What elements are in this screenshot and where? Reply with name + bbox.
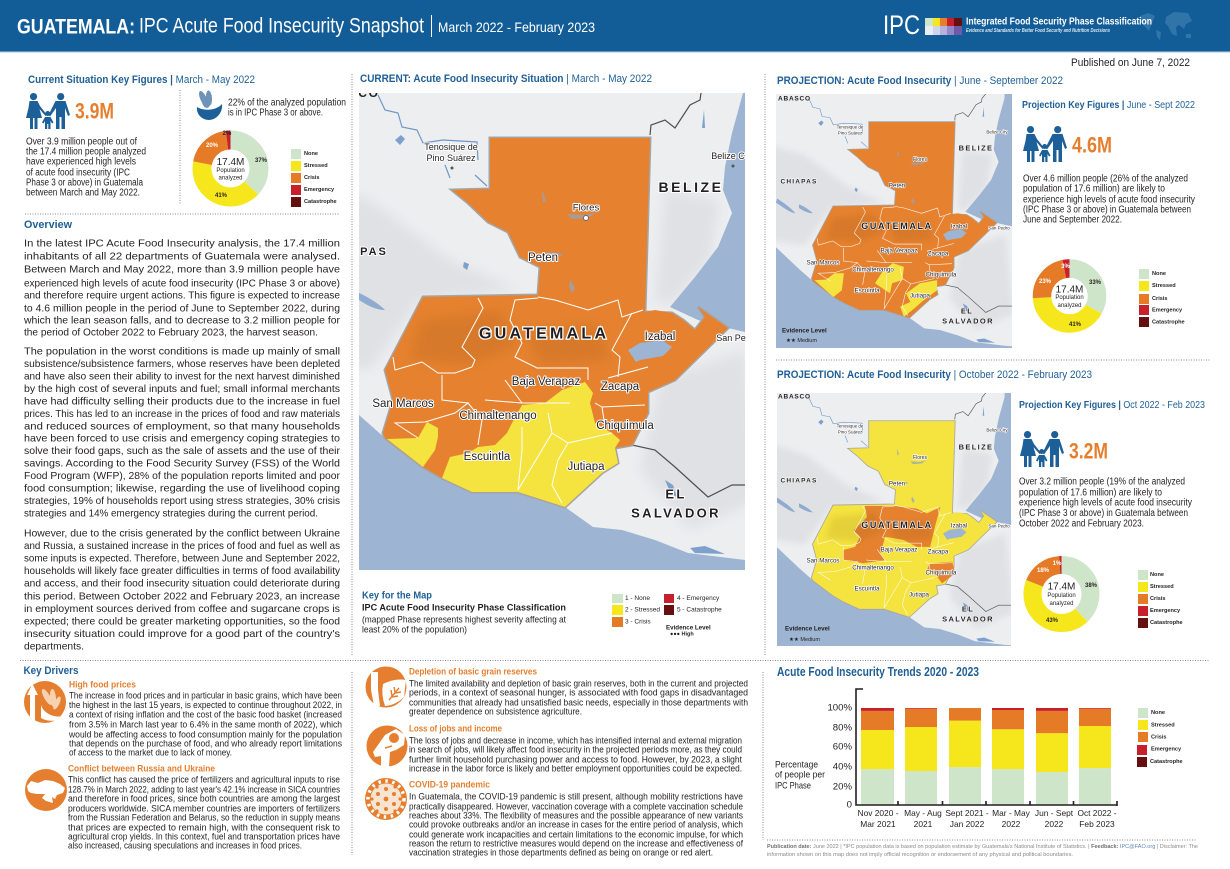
map: projection June-September: Peten (889, 182, 906, 190)
text: overview paragraph 1: Between March and May 2022, more than 3.9 million people have (24, 264, 340, 276)
driver: COVID-19 pandemic: could provoke outbreaks and/or an increase in cases for the entire period of analysis, which (409, 820, 743, 830)
heading: projection June-September: PROJECTION: Acute Food Insecurity | June - September 2022 (777, 75, 1063, 87)
key for the map: IPC Acute Food Insecurity Phase Classification (362, 602, 566, 614)
map: current situation: SALVADOR (631, 506, 721, 520)
legend: phases: None (1152, 271, 1166, 277)
map: current situation: Peten (528, 252, 558, 264)
panel: current map (280, 60, 820, 638)
map: projection June-September: Pino Suárez (838, 130, 863, 136)
legend: phases: None (1150, 572, 1164, 578)
map: projection June-September: SALVADOR (942, 316, 994, 326)
map: projection October-February: Escuintla (854, 586, 880, 592)
text: projection description: (IPC Phase 3 or above) in Guatemala between (1023, 204, 1191, 216)
map: current situation: PAS (360, 246, 388, 258)
map: projection June-September: GUATEMALA (861, 221, 933, 231)
map: current situation: GUATEMALA (479, 326, 606, 342)
map: projection June-September: BELIZE (959, 144, 993, 152)
donut chart: October-February population by phase: analyzed (1049, 601, 1074, 607)
x axis labels: Mar - May (992, 808, 1031, 818)
y axis title (775, 760, 826, 792)
heading: projection key figures: Projection Key Figures | June - Sept 2022 (1022, 99, 1195, 111)
text: overview paragraph 3: expected; there could be greater marketing opportunities, so the food (24, 616, 340, 628)
text: share in phase 3 or above: 22% of the analyzed population (228, 98, 346, 108)
y axis labels: 80% (833, 722, 852, 734)
driver: depletion of basic grain reserves: Depletion of basic grain reserves (409, 666, 537, 678)
driver: high food prices: from 3.5% in March last year to 6.4% in the same month of 2022), which (69, 720, 342, 730)
map: projection June-September: Escuintla (854, 288, 880, 294)
map evidence level: Evidence Level (785, 626, 830, 632)
map: projection June-September: Chiquimula (926, 272, 957, 278)
map: projection June-September: Zacapa (928, 250, 949, 258)
driver: loss of jobs and income: increase in the labor force is likely and better employment opportunities could be expected. (409, 764, 742, 774)
donut chart: June-September population by phase: 23% (1039, 279, 1052, 285)
legend: phases: Catastrophe (1150, 620, 1183, 626)
y axis title: Percentage (775, 760, 818, 770)
map evidence level (782, 328, 827, 344)
driver: loss of jobs and income: further limit household purchasing power and access to food. However, by 2023, a slight (409, 754, 742, 766)
figure: 4.6M people: 4.6M (1072, 132, 1112, 158)
y axis labels: 60% (833, 742, 852, 752)
map evidence level (785, 626, 830, 643)
driver: depletion of basic grain reserves: communities that already had unsatisfied basic needs, especially in those departments with (409, 698, 748, 708)
text: overview paragraph 3: this period. Between October 2022 and February 2023, an increase (24, 591, 340, 602)
text: projection description: population of 17.6 million) are likely to (1023, 184, 1165, 194)
map: current situation: Escuintla (464, 451, 511, 463)
text: overview paragraph 1: which the lean season falls, and to decrease to 3.2 million people for (23, 316, 341, 326)
text: overview paragraph 1: experienced high levels of acute food insecurity (IPC Phase 3 or above) (24, 278, 340, 290)
text: projection description (1019, 476, 1192, 530)
text: overview paragraph 2: and have also seen their ability to invest for the next harvest diminished (24, 372, 340, 382)
map: projection June-September: San Marcos (806, 260, 840, 266)
driver: high food prices: would be affecting access to food consumption mainly for the population (68, 730, 342, 740)
donut chart: June-September population by phase: analyzed (1057, 303, 1082, 309)
legend: phases: Emergency (304, 187, 335, 193)
legend: phases: Crisis (304, 175, 320, 181)
text: current figure description: Over 3.9 million people out of (26, 136, 137, 148)
text: current figure description: the 17.4 million people analyzed (26, 146, 146, 158)
map: projection October-February: Flores (913, 455, 927, 461)
map: current situation: Pino Suárez (426, 153, 476, 163)
text: share in phase 3 or above: is in IPC Phase 3 or above. (228, 108, 323, 118)
map: current situation: BELIZE (659, 179, 723, 195)
legend: phases: Catastrophe (1152, 320, 1185, 326)
text: overview paragraph 2: strategies, 19% of households report using stress strategies, 30% crisis (24, 496, 340, 507)
legend: phases: Crisis (1151, 734, 1167, 740)
figure: 3.9M people: 3.9M (75, 98, 114, 124)
text: overview paragraph 2: and reduced sources of employment, so that many households (24, 421, 340, 432)
text: projection description (1023, 174, 1195, 226)
map: current situation: San Marcos (372, 398, 434, 410)
driver: high food prices: the highest in the last 15 years, is expected to continue throughout 2022, in (69, 700, 342, 711)
panel: projection October-February (757, 369, 1205, 677)
panel: overview (23, 219, 341, 652)
map: projection June-September: Baja Verapaz (881, 248, 917, 254)
x axis labels: Oct 2022 - (1077, 808, 1117, 818)
key for the map (362, 590, 722, 638)
driver: conflict between Russia and Ukraine: and therefore in food prices, since both countries are among the largest (68, 794, 340, 804)
map evidence level: ★★ Medium (789, 636, 820, 643)
map: projection October-February: Chiquimula (926, 570, 957, 576)
y axis title: of people per (775, 770, 826, 780)
driver: depletion of basic grain reserves (366, 666, 748, 718)
donut chart: October-February population by phase: 18% (1037, 568, 1050, 574)
text: overview paragraph 3: households will likely face greater difficulties in terms of food availability (24, 566, 341, 577)
map: projection October-February: Belize City (986, 428, 1008, 432)
x axis labels: Nov 2020 - (858, 808, 899, 818)
text: projection description: population of 17.6 million) are likely to (1019, 488, 1162, 498)
legend: map phases: ●●● High (670, 632, 694, 638)
map: projection June-September: CHIAPAS (781, 178, 817, 186)
donut chart: June-September population by phase: Population (1055, 295, 1084, 301)
map: projection June-September: Belize City (986, 130, 1008, 134)
donut chart: June-September population by phase: 33% (1089, 280, 1102, 286)
heading: projection October-February: PROJECTION: Acute Food Insecurity | October 2022 - February 2023 (777, 369, 1092, 381)
map: current situation: EL (665, 486, 687, 502)
text: current figure description: have experienced high levels (26, 156, 136, 168)
legend: phases: Emergency (1151, 746, 1182, 752)
text: overview paragraph 2: The population in the worst conditions is made up mainly of small (24, 346, 340, 358)
map: current situation: Izabal (645, 331, 675, 343)
map: current situation: Belize C (711, 151, 745, 161)
driver: high food prices: of access to the market due to lack of money. (69, 748, 232, 758)
legend: phases: Stressed (1150, 584, 1174, 590)
IPC logo (883, 10, 1192, 40)
donut chart: October-February population by phase: 38% (1085, 583, 1098, 589)
driver: COVID-19 pandemic: vaccination strategies in those departments defined as being on orange or red alert. (409, 848, 713, 858)
text: overview paragraph 1: and therefore require urgent actions. This figure is expected to increase (24, 290, 340, 302)
text: overview paragraph 2: savings. According to the Food Security Survey (FSS) of the World (24, 459, 340, 470)
legend: phases: Crisis (1150, 596, 1166, 602)
donut chart: October-February population by phase: Population (1047, 593, 1076, 599)
map: current situation: Tenosique de (424, 142, 478, 152)
text: overview paragraph 3 (24, 528, 341, 652)
text: overview paragraph 3: and access, and their food insecurity situation could deteriorate during (24, 579, 340, 590)
heading: key drivers: Key Drivers (24, 665, 78, 677)
text: overview paragraph 1: In the latest IPC Acute Food Insecurity analysis, the 17.4 million (24, 238, 340, 250)
panel: trends chart (775, 665, 1183, 829)
map: projection October-February: Izabal (951, 522, 967, 530)
driver: conflict between Russia and Ukraine: from the Russian Federation and Belarus, so the reduction in supply means (68, 812, 340, 824)
x axis labels: Jun - Sept (1035, 808, 1074, 818)
map: projection October-February (757, 380, 1046, 677)
map: projection October-February: Zacapa (928, 548, 949, 556)
driver: high food prices: High food prices (69, 680, 136, 690)
heading: trends: Acute Food Insecurity Trends 2020 - 2023 (777, 665, 979, 679)
donut chart: June-September population by phase: 17.4M (1056, 284, 1083, 296)
driver: COVID-19 pandemic: reason the return to restrictive measures would depend on the increase and effectiveness of (409, 838, 743, 850)
publication date: Published on June 7, 2022 (1071, 57, 1190, 69)
driver: loss of jobs and income (366, 724, 742, 774)
map: projection June-September (757, 81, 1046, 378)
text: overview paragraph 2: have been forced to use crisis and emergency coping strategies to (24, 434, 340, 445)
driver: COVID-19 pandemic: could generate work incapacities and certain limitations to the economic impulse, for which (409, 830, 743, 840)
donut chart: October-February population by phase: 1% (1053, 561, 1062, 567)
legend: phases (291, 149, 337, 207)
footer notes: information shown on this map does not imply official recognition or endorsement of any physical and political boundaries. (767, 852, 1073, 858)
map: projection October-February: CHIAPAS (781, 478, 817, 484)
text: projection description: Over 3.2 million people (19% of the analyzed (1019, 476, 1185, 488)
y axis labels: 40% (833, 762, 852, 772)
donut chart: current population by phase: analyzed (218, 176, 243, 182)
text: overview paragraph 2: strategies and 14% emergency strategies during the current period. (24, 508, 318, 520)
report title (17, 14, 595, 38)
driver: conflict between Russia and Ukraine: that prices are expected to remain high, with the consequent risk to (68, 822, 340, 834)
donut chart: October-February population by phase: 17.4M (1048, 582, 1075, 592)
legend: phases: Crisis (1152, 296, 1168, 302)
driver: COVID-19 pandemic: COVID-19 pandemic (409, 780, 491, 790)
donut chart: October-February population by phase (1032, 561, 1098, 624)
driver: depletion of basic grain reserves: greater dependence on subsistence agriculture. (409, 706, 582, 718)
driver: depletion of basic grain reserves: The limited availability and depletion of basic grain reserves, both in the current and projected (409, 678, 748, 690)
map: projection October-February: Chimaltenango (852, 564, 894, 572)
driver: high food prices: The increase in food prices and in particular in basic grains, which have been (69, 690, 342, 702)
donut chart: current population by phase: Population (216, 168, 245, 174)
driver: conflict between Russia and Ukraine: producers worldwide. SICA member countries are importers of fertilizers (68, 804, 340, 814)
map: projection June-September: ABASCO (778, 96, 811, 102)
x axis labels: Jan 2022 (950, 819, 985, 829)
y axis labels (827, 702, 852, 810)
legend: phases: Stressed (1152, 283, 1176, 289)
x axis labels: 2022 (1002, 819, 1021, 829)
text: projection description: Over 4.6 million people (26% of the analyzed (1023, 174, 1188, 184)
driver: loss of jobs and income: Loss of jobs and income (409, 724, 502, 734)
map evidence level: Evidence Level (782, 328, 827, 334)
icon: worried person (366, 726, 408, 767)
footer notes (767, 844, 1199, 858)
text: overview paragraph 2: Food Program (WFP), 28% of the population reports limited and poor (24, 471, 341, 482)
text: current figure description: Phase 3 or above) in Guatemala (26, 178, 143, 188)
map: projection October-February: GUATEMALA (861, 520, 933, 530)
icon: family (1023, 126, 1067, 162)
legend: phases: Catastrophe (304, 199, 337, 205)
map: projection October-February: San Pedro (988, 524, 1010, 528)
icon: coronavirus (365, 778, 407, 820)
map: current situation: San Pe (716, 333, 746, 343)
map: current situation: Zacapa (601, 381, 640, 393)
x axis labels (858, 808, 1117, 829)
donut chart: June-September population by phase: 3% (1061, 264, 1071, 270)
x axis labels: Sept 2021 - (945, 808, 989, 818)
text: overview paragraph 1: the period of October 2022 to February 2023, the harvest season. (24, 328, 318, 338)
heading: current map: CURRENT: Acute Food Insecurity Situation | March - May 2022 (360, 73, 652, 85)
x axis labels: 2022 (1045, 819, 1064, 829)
map: projection October-February: San Marcos (806, 558, 840, 564)
report title: GUATEMALA: (17, 16, 135, 38)
driver: loss of jobs and income: in search of jobs, will likely affect food insecurity in the projected periods more, as they could (409, 744, 742, 756)
stacked bar chart (775, 689, 1117, 829)
text: projection description: (IPC Phase 3 or above) in Guatemala between (1019, 508, 1188, 519)
report title: IPC Acute Food Insecurity Snapshot (139, 14, 424, 38)
header banner (0, 0, 1230, 53)
legend: phases (1137, 708, 1183, 767)
donut chart: June-September population by phase (1039, 264, 1102, 328)
map: current situation (280, 60, 820, 620)
icon: map of Ukraine (25, 769, 67, 811)
driver: conflict between Russia and Ukraine: This conflict has caused the price of fertilizers and agricultural inputs to rise (68, 774, 340, 786)
legend: map phases: 5 - Catastrophe (677, 606, 722, 614)
legend: phases: None (1151, 710, 1165, 716)
map: current situation: Jutiapa (567, 461, 605, 473)
legend: phases: Catastrophe (1150, 759, 1183, 765)
heading: current situation key figures: Current Situation Key Figures | March - May 2022 (28, 74, 255, 86)
text: overview paragraph 2 (24, 346, 341, 520)
map: projection June-September: Tenosique de (837, 124, 864, 130)
map: current situation: Flores (573, 202, 599, 214)
text: overview paragraph 1: inhabitants of all 22 departments of Guatemala were analysed. (24, 252, 340, 262)
legend: phases: Emergency (1150, 608, 1181, 614)
legend: map phases: 2 - Stressed (625, 606, 660, 614)
donut chart: June-September population by phase: 41% (1069, 322, 1082, 328)
donut chart: current population by phase (202, 131, 268, 199)
map: current situation: Chimaltenango (459, 410, 537, 422)
driver: COVID-19 pandemic (365, 778, 743, 858)
driver: conflict between Russia and Ukraine: Conflict between Russia and Ukraine (68, 764, 215, 774)
x axis labels: Mar 2021 (860, 819, 896, 829)
donut chart: current population by phase: 2% (223, 131, 232, 137)
map: projection June-September: EL (961, 306, 973, 316)
footer notes: Publication date: June 2022 | *IPC population data is based on population estimate by Guatemala's National Institute of Statistics. | Feedback: IPC@FAO.org | Disclaimer: The (767, 844, 1199, 850)
text: overview paragraph 2: solve their food gaps, such as the sale of assets and the use of their (24, 446, 341, 457)
map: current situation: CO (358, 86, 380, 100)
map: projection June-September: Izabal (951, 224, 967, 230)
x axis labels: Feb 2023 (1079, 819, 1115, 829)
map: projection October-February: Baja Verapaz (881, 546, 917, 554)
IPC logo: Evidence and Standards for Better Food Security and Nutrition Decisions (966, 28, 1110, 34)
key for the map: Key for the Map (362, 590, 432, 602)
text: overview paragraph 3: some inputs is expected. Therefore, between June and September 2022, (24, 554, 340, 564)
icon: empty grain store (366, 666, 406, 708)
heading: projection key figures: Projection Key Figures | Oct 2022 - Feb 2023 (1019, 399, 1205, 411)
donut chart: current population by phase: 17.4M (217, 157, 244, 168)
text: current figure description (26, 136, 146, 198)
driver: depletion of basic grain reserves: periods, in a context of seasonal hunger, is associated with food gaps in disadvantaged (409, 688, 748, 698)
legend: phases (1138, 570, 1183, 628)
map: projection June-September: San Pedro (988, 226, 1010, 230)
icon: bowl of grain (197, 90, 222, 120)
driver: high food prices: a context of rising inflation and the cost of the basic food basket (increased (69, 710, 342, 720)
icon: family (1020, 431, 1064, 467)
map: projection October-February: Jutiapa (909, 592, 930, 598)
map: projection October-February: BELIZE (959, 442, 993, 452)
map: projection June-September: Jutiapa (910, 292, 931, 300)
IPC logo: IPC (883, 10, 920, 40)
legend: phases: Stressed (304, 163, 328, 169)
text: overview paragraph 1: to 4.6 million people in the period of June to September 2022, during (24, 304, 340, 314)
y axis labels: 20% (833, 782, 852, 792)
text: projection description: June and September 2022. (1023, 214, 1122, 226)
map evidence level: ★★ Medium (786, 337, 817, 344)
panel: current key figures (26, 74, 346, 207)
legend: map phases: 3 - Crisis (625, 618, 651, 626)
y axis labels: 100% (827, 702, 852, 714)
map: projection June-September: Flores (913, 157, 927, 163)
map: projection October-February: Peten (889, 480, 906, 488)
IPC logo: Integrated Food Security Phase Classification (966, 16, 1152, 28)
driver: high food prices (24, 680, 342, 758)
legend: phases: Emergency (1152, 308, 1183, 314)
legend: map phases: Evidence Level (666, 624, 711, 632)
figure: 3.2M people: 3.2M (1069, 438, 1108, 464)
y axis labels: 0 (847, 800, 852, 810)
map: current situation: Chiquimula (596, 420, 654, 432)
key for the map: least 20% of the population) (362, 624, 467, 636)
text: overview paragraph 2: subsistence/subsistence farmers, whose reserves have been depleted (24, 359, 340, 370)
legend: phases: Stressed (1151, 722, 1175, 728)
text: projection description: experience high levels of acute food insecurity (1023, 194, 1195, 206)
report title: March 2022 - February 2023 (438, 19, 595, 35)
driver: COVID-19 pandemic: practically disappeared. However, vaccination coverage with a complete vaccination schedule (409, 802, 743, 812)
driver: COVID-19 pandemic: In Guatemala, the COVID-19 pandemic is still present, although mobility restrictions have (409, 792, 743, 802)
x axis labels: 2021 (914, 819, 933, 829)
text: overview paragraph 3: in employment sources derived from coffee and sugarcane crops is (24, 604, 340, 615)
text: overview paragraph 3: and Russia, a sustained increase in the prices of food and fuel as well as (24, 541, 340, 552)
legend: phases: None (304, 151, 318, 157)
legend: map phases (612, 594, 722, 638)
icon: rising grain prices (24, 681, 66, 723)
key for the map: (mapped Phase represents highest severity affecting at (362, 614, 566, 626)
heading: overview: Overview (24, 219, 72, 231)
map: projection October-February: ABASCO (778, 394, 811, 400)
panel: projection June-September (757, 75, 1195, 378)
text: overview paragraph 3: departments. (24, 642, 84, 652)
driver: conflict between Russia and Ukraine: 128.7% in March 2022, adding to last year's 42.1% increase in SICA countries (68, 784, 340, 796)
legend: phases (1139, 269, 1185, 327)
text: overview paragraph 2: by the high cost of several inputs and fuel; small informal merchants (24, 384, 340, 395)
text: share in phase 3 or above (228, 98, 346, 118)
text: current figure description: between March and May 2022. (26, 188, 140, 198)
text: overview paragraph 1 (23, 238, 341, 338)
donut chart: current population by phase: 41% (215, 193, 228, 199)
legend: map phases: 1 - None (625, 595, 650, 602)
icon: family (26, 93, 70, 129)
driver: conflict between Russia and Ukraine: also increased, causing speculations and increases in food prices. (68, 840, 302, 852)
text: overview paragraph 2: food consumption; likewise, regarding the use of livelihood coping (24, 484, 340, 494)
text: overview paragraph 3: insecurity situation could improve for a good part of the country's (24, 629, 340, 640)
y axis title: IPC Phase (775, 780, 811, 792)
legend: map phases: 4 - Emergency (677, 595, 720, 602)
driver: COVID-19 pandemic: reaches about 33%. The flexibility of measures and the possible appearance of new variants (409, 810, 743, 822)
map: projection October-February: Tenosique de (837, 424, 864, 428)
x axis labels: May - Aug (904, 808, 942, 818)
text: current figure description: of acute food insecurity (IPC (26, 168, 130, 178)
driver: high food prices: that depends on the purchase of food, and who already report limitations (69, 738, 342, 750)
driver: loss of jobs and income: The loss of jobs and decrease in income, which has intensified internal and external migration (409, 736, 742, 746)
map: projection October-February: Pino Suárez (838, 430, 863, 434)
donut chart: current population by phase: 20% (206, 143, 219, 149)
map: projection October-February: EL (962, 604, 974, 614)
map: projection October-February: SALVADOR (942, 614, 994, 624)
text: projection description: experience high levels of acute food insecurity (1019, 498, 1192, 508)
donut chart: current population by phase: 37% (255, 158, 268, 164)
map: projection June-September: Chimaltenango (852, 266, 894, 274)
driver: conflict between Russia and Ukraine (25, 764, 340, 852)
map: current situation: Baja Verapaz (512, 376, 580, 388)
donut chart: October-February population by phase: 43% (1046, 618, 1059, 624)
panel: key drivers (24, 665, 748, 858)
text: overview paragraph 2: have had difficulty selling their products due to the increase in fuel (24, 396, 340, 407)
text: overview paragraph 2: prices. This has led to an increase in the prices of food and raw materials (24, 409, 340, 420)
driver: conflict between Russia and Ukraine: agricultural crop yields. In this context, fuel and transportation prices have (68, 832, 340, 842)
text: projection description: October 2022 and February 2023. (1019, 518, 1144, 530)
text: overview paragraph 3: However, due to the crisis generated by the conflict between Ukraine (24, 528, 340, 540)
